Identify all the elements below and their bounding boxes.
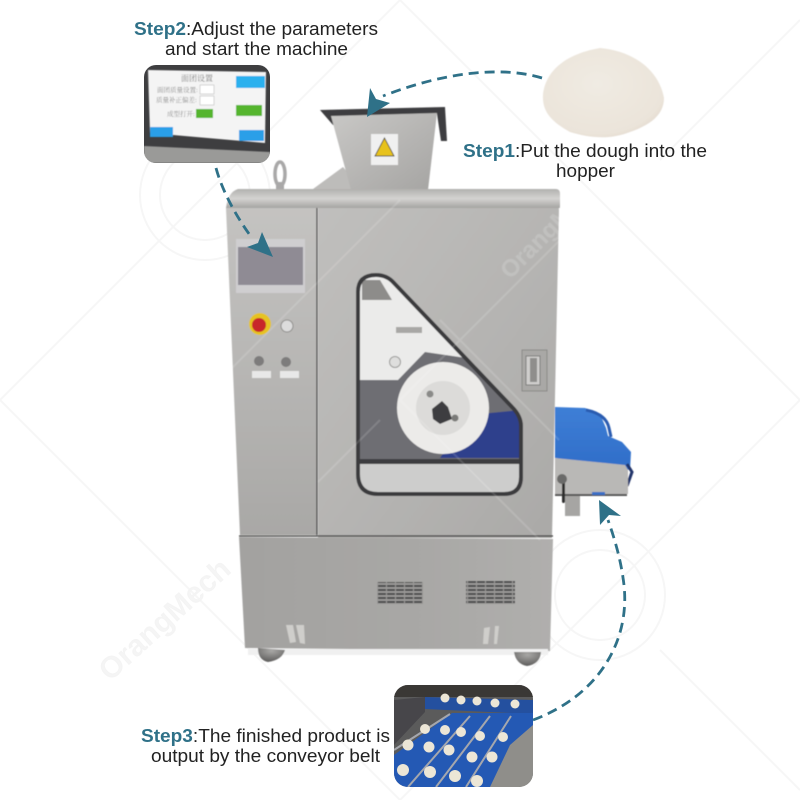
emergency stop button [249, 313, 271, 335]
left control panel [226, 208, 317, 535]
dough balls [397, 694, 520, 787]
step 3 text: Step3:The finished product is [141, 725, 384, 746]
arrow: step 1 dough to hopper [367, 72, 542, 117]
conveyor [555, 407, 632, 516]
selector switches [252, 356, 299, 378]
inset: touch screen photo: 成型打开: [167, 109, 195, 118]
door latch [522, 350, 547, 391]
step 1 text: hopper [556, 160, 615, 181]
inset: touch screen photo: 质量补正偏差: [156, 95, 197, 104]
arrow: step 3 product to conveyor [533, 500, 625, 720]
step 2 text: Step2:Adjust the parameters [134, 18, 372, 39]
hopper [313, 107, 447, 190]
door [317, 208, 559, 538]
inset: dough ball [543, 48, 664, 137]
step 2 text: and start the machine [165, 38, 348, 59]
lifting ring bolt [275, 162, 285, 189]
handles [286, 625, 499, 644]
watermark overlay on machine: OrangMech [495, 172, 608, 284]
inset: touch screen photo [144, 65, 270, 163]
top cover [226, 189, 560, 208]
leveling feet [248, 648, 548, 666]
machine [226, 106, 634, 667]
inspection window [358, 275, 523, 496]
step 3 text: output by the conveyor belt [151, 745, 380, 766]
watermark pattern: OrangMech [93, 552, 237, 687]
inset: touch screen photo: 面团设置 [181, 73, 213, 83]
ventilation grille [377, 581, 515, 604]
inset: finished product on conveyor [394, 685, 533, 787]
arrow: step 2 screen to panel [216, 168, 273, 257]
step 1 text: Step1:Put the dough into the [463, 140, 701, 161]
inset: touch screen photo: 面团质量设置: [157, 85, 198, 94]
touch screen [236, 239, 305, 293]
watermark overlay on machine: OrangMech [93, 552, 237, 687]
lower cabinet [239, 536, 553, 651]
white push button [281, 320, 293, 332]
watermark overlay on machine [93, 172, 608, 687]
white roller disc [397, 362, 489, 454]
